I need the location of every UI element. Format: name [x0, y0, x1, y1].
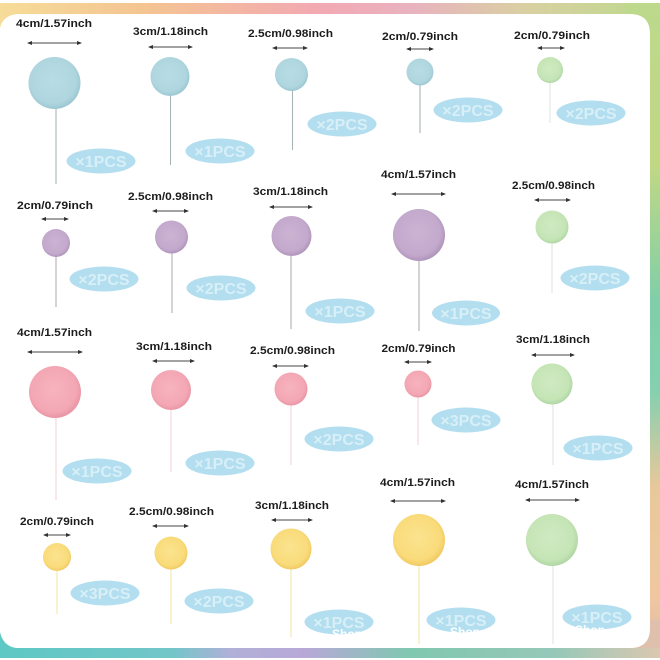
ball	[393, 209, 445, 261]
quantity badge: ×3PCS	[440, 413, 492, 430]
size label: 2cm/0.79inch	[382, 31, 458, 43]
ball	[272, 216, 312, 256]
ball	[151, 370, 191, 410]
width arrow	[407, 48, 433, 50]
width arrow	[526, 499, 579, 501]
item: green ball 4cm	[515, 479, 632, 644]
quantity badge: Shop	[575, 623, 605, 637]
size label: 3cm/1.18inch	[136, 341, 212, 353]
quantity badge: ×1PCS	[194, 144, 246, 161]
ball	[43, 543, 71, 571]
item: pink ball 3cm	[136, 341, 254, 476]
quantity badge: ×2PCS	[193, 594, 245, 611]
size label: 2.5cm/0.98inch	[128, 191, 213, 203]
quantity badge: ×3PCS	[79, 586, 131, 603]
width arrow	[153, 525, 188, 527]
item: yellow ball 2.5cm	[129, 506, 254, 624]
size label: 4cm/1.57inch	[16, 18, 92, 30]
stick	[552, 404, 554, 465]
quantity badge: ×1PCS	[571, 610, 623, 627]
ball	[28, 57, 80, 109]
stick	[55, 417, 57, 500]
quantity badge	[306, 298, 374, 324]
item: purple ball 2cm	[17, 200, 138, 307]
item: pink ball 2.5cm	[250, 345, 374, 465]
size label: 2cm/0.79inch	[17, 200, 93, 212]
quantity badge: ×2PCS	[78, 272, 130, 289]
width arrow	[538, 47, 564, 49]
width arrow	[44, 534, 70, 536]
item: blue ball 4cm	[16, 18, 136, 184]
stick	[170, 409, 172, 472]
quantity badge	[66, 148, 136, 174]
ball	[404, 370, 432, 398]
item: green ball 2cm	[514, 30, 626, 126]
stick	[418, 260, 420, 331]
quantity badge: ×1PCS	[313, 615, 365, 632]
stick	[417, 397, 419, 445]
ball	[536, 210, 568, 244]
width arrow	[42, 218, 68, 220]
item: yellow ball 4cm	[380, 477, 496, 644]
stick	[56, 570, 58, 614]
stick	[170, 94, 172, 165]
quantity badge: Shop	[450, 625, 480, 639]
quantity badge: ×1PCS	[194, 456, 246, 473]
stick	[290, 255, 292, 329]
quantity badge: ×1PCS	[314, 304, 366, 321]
width arrow	[272, 519, 312, 521]
item: blue ball 2cm	[382, 31, 502, 133]
ball	[29, 366, 81, 418]
width arrow	[153, 360, 194, 362]
quantity badge: ×2PCS	[195, 281, 247, 298]
ball	[270, 528, 312, 570]
size label: 3cm/1.18inch	[253, 186, 328, 198]
ball	[406, 58, 434, 86]
item: blue ball 2.5cm	[248, 28, 376, 150]
quantity badge	[62, 458, 132, 484]
width arrow	[391, 500, 445, 502]
width arrow	[153, 210, 188, 212]
width arrow	[392, 193, 445, 195]
item: pink ball 4cm	[17, 327, 132, 500]
quantity badge	[426, 608, 496, 639]
width arrow	[28, 351, 82, 353]
size label: 2cm/0.79inch	[382, 343, 456, 355]
quantity badge: ×2PCS	[442, 103, 494, 120]
ball	[393, 514, 445, 566]
stick	[552, 565, 554, 644]
width arrow	[28, 42, 81, 44]
quantity badge: ×1PCS	[71, 464, 123, 481]
width arrow	[273, 365, 308, 367]
ball	[150, 57, 190, 96]
size label: 4cm/1.57inch	[515, 479, 589, 491]
ball	[154, 536, 188, 570]
size label: 2cm/0.79inch	[20, 516, 94, 528]
stick	[549, 83, 551, 123]
item: green ball 2.5cm	[512, 180, 630, 293]
quantity badge	[562, 604, 632, 637]
stick	[290, 569, 292, 637]
stick	[292, 90, 294, 150]
size label: 2cm/0.79inch	[514, 30, 590, 42]
quantity badge: ×2PCS	[569, 271, 621, 288]
ball	[526, 514, 578, 566]
size label: 2.5cm/0.98inch	[512, 180, 595, 192]
quantity badge	[304, 610, 374, 641]
size label: 2.5cm/0.98inch	[129, 506, 214, 518]
item: purple ball 3cm	[253, 186, 374, 329]
stick	[55, 256, 57, 307]
stick	[55, 108, 57, 184]
quantity badge	[432, 300, 500, 326]
quantity badge: ×2PCS	[316, 117, 368, 134]
size label: 3cm/1.18inch	[133, 26, 208, 38]
quantity badge: ×2PCS	[565, 106, 617, 123]
item: purple ball 2.5cm	[128, 191, 256, 313]
size label: 4cm/1.57inch	[17, 327, 92, 339]
item: green ball 3cm	[516, 334, 632, 465]
size label: 3cm/1.18inch	[516, 334, 590, 346]
width arrow	[535, 199, 570, 201]
ball	[532, 364, 572, 404]
item: blue ball 3cm	[133, 26, 254, 165]
stick	[551, 243, 553, 293]
item: pink ball 2cm	[382, 343, 500, 445]
ball	[155, 220, 188, 254]
item: yellow ball 3cm	[255, 500, 374, 641]
width arrow	[405, 361, 431, 363]
size label: 2.5cm/0.98inch	[248, 28, 333, 40]
size label: 4cm/1.57inch	[381, 169, 456, 181]
width arrow	[270, 206, 312, 208]
quantity badge: ×1PCS	[435, 613, 487, 630]
stick	[419, 85, 421, 133]
ball	[275, 58, 308, 91]
width arrow	[532, 354, 574, 356]
size label: 4cm/1.57inch	[380, 477, 455, 489]
ball	[537, 57, 563, 83]
quantity badge: Shop	[332, 627, 362, 641]
quantity badge: ×1PCS	[440, 306, 492, 323]
stick	[170, 569, 172, 624]
item: purple ball 4cm	[381, 169, 500, 331]
size label: 2.5cm/0.98inch	[250, 345, 335, 357]
quantity badge: ×1PCS	[572, 441, 624, 458]
quantity badge: ×1PCS	[75, 154, 127, 171]
ball	[42, 229, 70, 257]
width arrow	[273, 47, 307, 49]
ball	[274, 372, 308, 406]
quantity badge: ×2PCS	[313, 432, 365, 449]
stick	[290, 405, 292, 465]
size label: 3cm/1.18inch	[255, 500, 329, 512]
stick	[418, 565, 420, 644]
stick	[171, 253, 173, 313]
item: yellow ball 2cm	[20, 516, 140, 614]
width arrow	[149, 46, 192, 48]
